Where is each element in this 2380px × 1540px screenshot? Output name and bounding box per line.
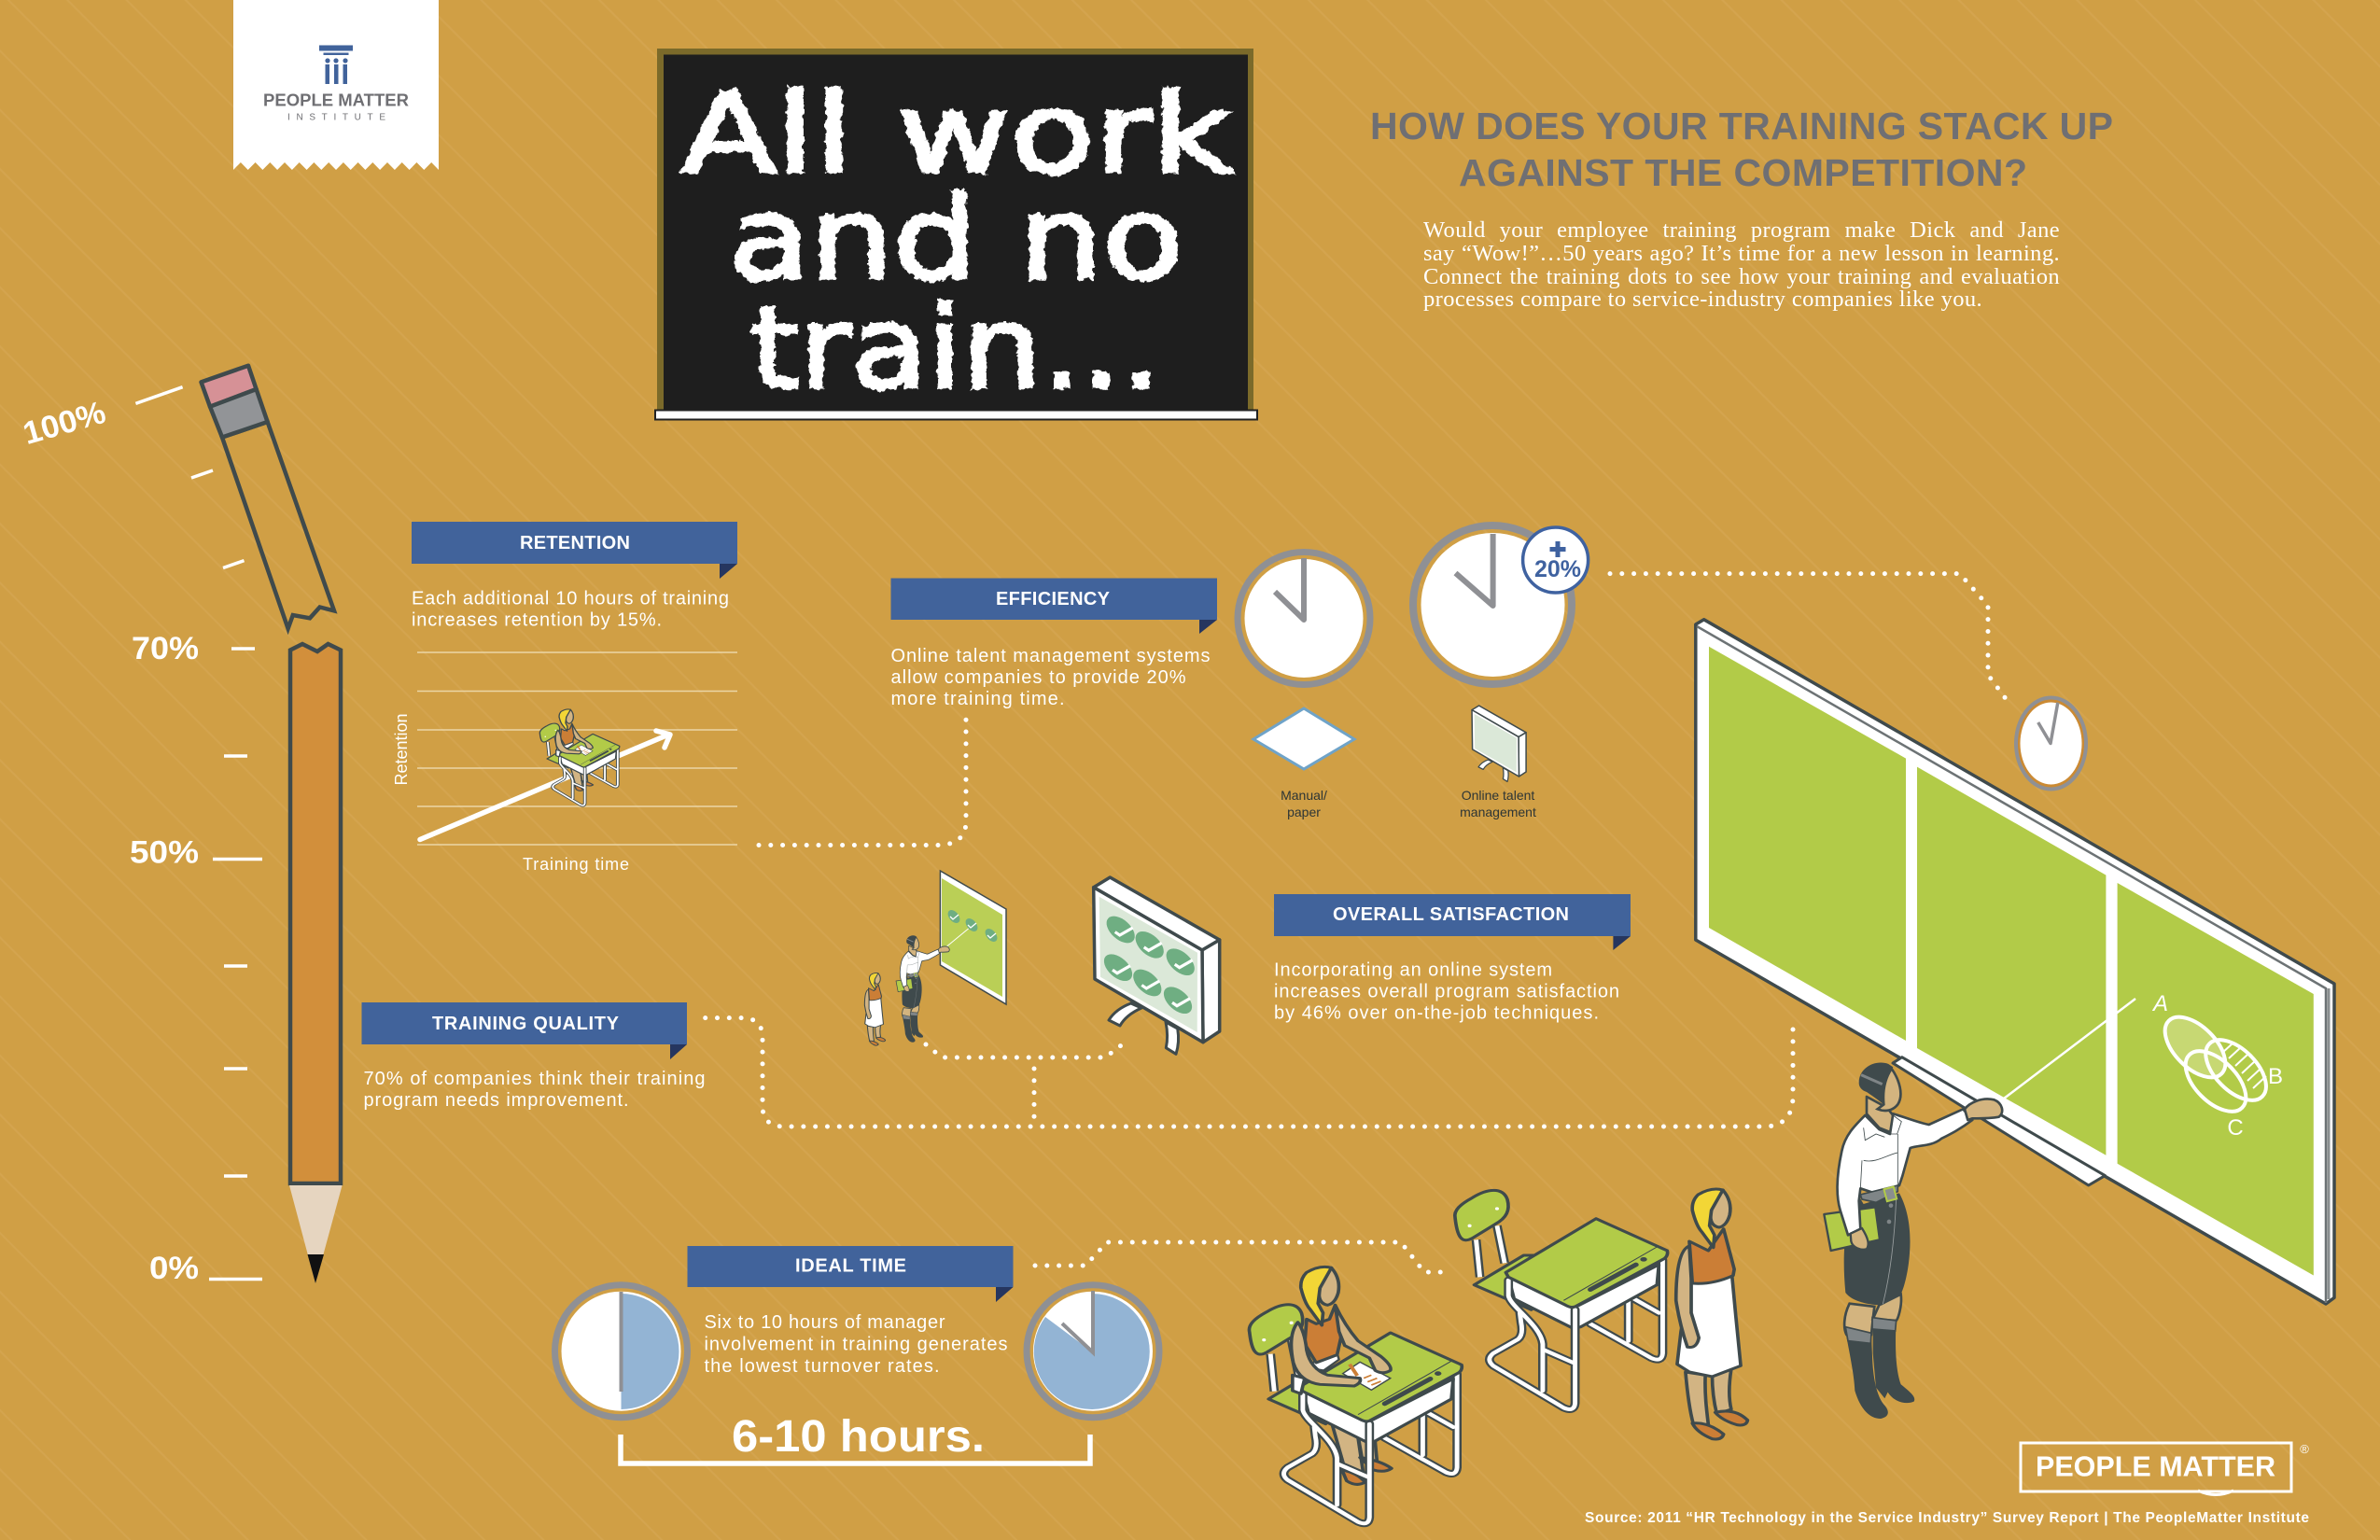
retention text: increases retention by 15%. xyxy=(412,610,662,631)
training quality text xyxy=(364,1069,706,1111)
logo: PeopleMatter Institute tab xyxy=(233,0,439,170)
intro paragraph: say “Wow!”…50 years ago? It’s time for a new lesson in learning. xyxy=(1423,241,2060,266)
title: chalkboard: train... xyxy=(750,282,1161,414)
scale labels: 70% xyxy=(132,631,199,666)
clock: online +20% xyxy=(1413,525,1589,684)
6-10 hours label and bracket: 6-10 hours. xyxy=(732,1412,985,1462)
heading xyxy=(1370,105,2113,194)
overall satisfaction text: increases overall program satisfaction xyxy=(1274,982,1619,1002)
small seated student xyxy=(539,709,620,805)
venn diagram: A xyxy=(2151,991,2168,1016)
retention line chart xyxy=(392,652,737,874)
pencil lower section xyxy=(289,644,343,1283)
board ledge xyxy=(1893,1057,2105,1185)
intro paragraph: Would your employee training program make Dick and Jane xyxy=(1423,217,2060,243)
illustration: large board xyxy=(1696,620,2334,1304)
efficiency text: allow companies to provide 20% xyxy=(890,667,1186,688)
training quality text: program needs improvement. xyxy=(364,1090,629,1111)
logo: PeopleMatter Institute tab: INSTITUTE xyxy=(287,112,385,123)
retention text xyxy=(412,588,729,631)
illustration: teacher xyxy=(1824,1063,2002,1419)
retention banner xyxy=(412,522,737,579)
scale labels xyxy=(19,395,199,1286)
venn diagram xyxy=(2151,991,2283,1141)
efficiency banner: EFFICIENCY xyxy=(996,589,1111,609)
pencil thermometer chart xyxy=(19,366,343,1286)
efficiency text: more training time. xyxy=(890,689,1064,709)
clock: manual xyxy=(1238,553,1370,685)
ideal time text xyxy=(704,1312,1008,1377)
panel: retention xyxy=(392,522,737,874)
board panel right xyxy=(2118,883,2314,1275)
label: manual paper: Manual/ xyxy=(1281,788,1327,803)
retention line chart: Retention xyxy=(392,713,411,786)
mini scene: teacher at board xyxy=(864,871,1006,1045)
mini teacher xyxy=(896,935,949,1043)
scale labels: 50% xyxy=(130,834,199,870)
large monitor with checks xyxy=(1094,877,1220,1054)
overall satisfaction text: by 46% over on-the-job techniques. xyxy=(1274,1003,1599,1024)
clock: most of the hour xyxy=(1027,1285,1159,1418)
logo: PeopleMatter: PEOPLE MATTER xyxy=(2036,1450,2275,1483)
panel: ideal time xyxy=(554,1246,1159,1463)
ideal time banner xyxy=(687,1246,1014,1302)
pencil upper broken section xyxy=(202,366,334,629)
icon: small monitor xyxy=(1472,706,1526,781)
label: online talent management xyxy=(1460,788,1536,819)
efficiency text xyxy=(890,646,1210,709)
ideal time text: involvement in training generates xyxy=(704,1335,1008,1355)
mini board xyxy=(940,871,1006,1004)
panel: overall satisfaction xyxy=(1274,894,1631,1024)
heading: HOW DOES YOUR TRAINING STACK UP xyxy=(1370,105,2113,147)
board panel left xyxy=(1709,647,1906,1041)
ideal time text: Six to 10 hours of manager xyxy=(704,1312,945,1333)
retention line chart: Training time xyxy=(523,855,629,874)
overall satisfaction text: Incorporating an online system xyxy=(1274,960,1552,981)
+20% badge: 20% xyxy=(1534,556,1581,582)
training quality banner xyxy=(362,1002,687,1059)
overall satisfaction banner: OVERALL SATISFACTION xyxy=(1333,904,1569,925)
logo: PeopleMatter Institute tab: PEOPLE MATTER xyxy=(263,91,409,110)
illustration: standing student xyxy=(1676,1189,1747,1439)
title: chalkboard xyxy=(655,49,1257,420)
illustration: empty desk xyxy=(1455,1190,1668,1409)
label: online talent management: Online talent xyxy=(1462,788,1534,803)
+20% badge xyxy=(1523,527,1589,593)
illustration: seated student at desk xyxy=(1249,1267,1462,1523)
venn diagram: B xyxy=(2268,1064,2283,1089)
panel: training quality xyxy=(362,1002,706,1111)
training quality text: 70% of companies think their training xyxy=(364,1069,706,1089)
scale ticks xyxy=(135,387,262,1279)
ideal time text: the lowest turnover rates. xyxy=(704,1356,939,1377)
chalk pointer line xyxy=(2003,999,2135,1099)
efficiency banner xyxy=(890,579,1217,634)
logo: PeopleMatter xyxy=(2021,1442,2309,1495)
6-10 hours label and bracket xyxy=(621,1412,1090,1463)
clock on wall xyxy=(2016,698,2086,790)
icon: paper xyxy=(1253,708,1354,769)
board panel centre xyxy=(1917,767,2106,1155)
venn diagram: C xyxy=(2227,1115,2244,1141)
efficiency text: Online talent management systems xyxy=(890,646,1210,666)
scale labels: 0% xyxy=(149,1251,199,1286)
intro paragraph: processes compare to service-industry companies like you. xyxy=(1423,287,1982,312)
title: chalkboard: and no xyxy=(729,173,1183,305)
retention text: Each additional 10 hours of training xyxy=(412,588,729,609)
retention banner: RETENTION xyxy=(520,533,630,553)
clock: half hour xyxy=(554,1285,687,1418)
ideal time banner: IDEAL TIME xyxy=(795,1256,906,1277)
source note: Source: 2011 “HR Technology in the Service Industry” Survey Report | The PeopleMatter Institute xyxy=(1585,1510,2309,1526)
logo: PeopleMatter: ® xyxy=(2300,1442,2309,1456)
dotted connectors xyxy=(706,574,2009,1272)
panel: efficiency xyxy=(890,525,1589,819)
overall satisfaction banner xyxy=(1274,894,1631,950)
mini student xyxy=(864,973,886,1045)
scale labels: 100% xyxy=(19,395,109,452)
training quality banner: TRAINING QUALITY xyxy=(432,1014,620,1034)
title: chalkboard: All work xyxy=(681,69,1232,198)
heading: AGAINST THE COMPETITION? xyxy=(1459,151,2027,194)
intro paragraph: Connect the training dots to see how your training and evaluation xyxy=(1423,264,2060,289)
intro paragraph xyxy=(1423,217,2060,312)
overall satisfaction text xyxy=(1274,960,1619,1024)
label: manual paper: paper xyxy=(1287,805,1321,819)
label: online talent management: management xyxy=(1460,805,1536,819)
label: manual paper xyxy=(1281,788,1327,819)
